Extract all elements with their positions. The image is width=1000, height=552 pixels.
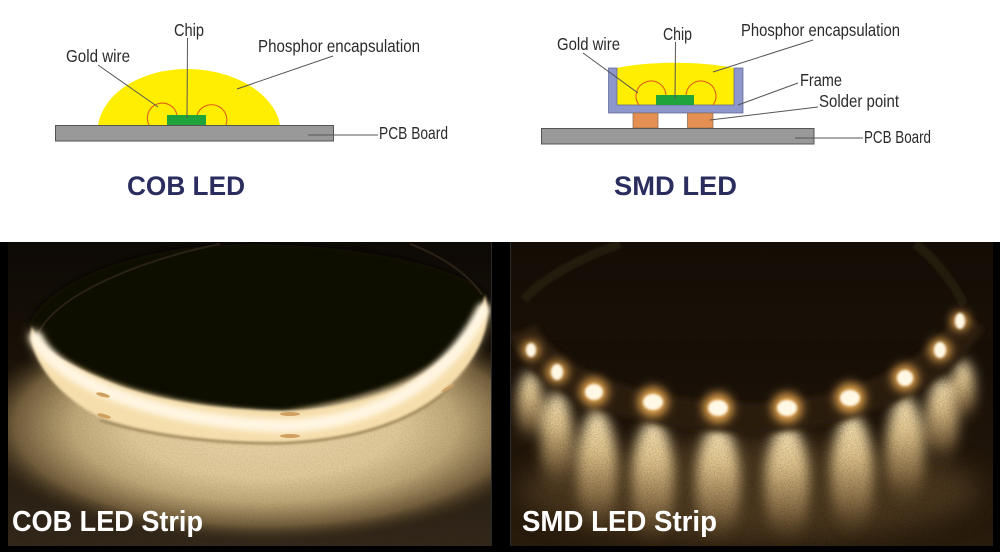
panel: COB LED strip photo [8, 242, 492, 546]
label: Solder point: Solder point [819, 91, 899, 111]
label: Gold wire: Gold wire [66, 46, 130, 66]
panel: SMD LED diagram [542, 20, 931, 147]
panel: COB LED diagram [56, 20, 448, 143]
PCB board [56, 126, 334, 141]
LED halos [522, 312, 969, 423]
LED chips [526, 313, 965, 416]
caption: COB LED Strip: COB LED Strip [12, 506, 203, 538]
photo background [510, 242, 993, 546]
floor glow [520, 440, 980, 540]
panel: SMD LED strip photo [510, 242, 993, 546]
frame [608, 68, 743, 113]
solder points [633, 113, 713, 128]
back of strip [38, 244, 482, 335]
label: Chip: Chip [174, 20, 204, 40]
label: Gold wire: Gold wire [557, 34, 620, 54]
grain [11, 370, 491, 528]
leader lines [98, 38, 378, 135]
label: PCB Board: PCB Board [864, 127, 931, 147]
strip bright core [36, 310, 483, 426]
black photo band [0, 242, 1000, 552]
leader lines [583, 40, 863, 138]
strip band [523, 320, 972, 418]
caption: SMD LED Strip: SMD LED Strip [522, 506, 717, 538]
label: PCB Board: PCB Board [379, 123, 448, 143]
heading: COB LED: COB LED [127, 171, 245, 201]
label: Chip: Chip [663, 24, 692, 44]
strip crescent [31, 295, 488, 441]
dark inner area of the loop [28, 274, 484, 412]
strip glow [22, 299, 491, 384]
floor glow [8, 350, 491, 538]
gold wires [636, 81, 716, 105]
phosphor dome [98, 69, 280, 125]
solder marks [96, 383, 455, 438]
shadow under strip [100, 388, 450, 443]
chip [167, 115, 206, 125]
heading: SMD LED: SMD LED [614, 171, 737, 201]
label: Phosphor encapsulation: Phosphor encapsulation [258, 36, 420, 56]
photo edge line [491, 242, 492, 546]
photo edge line [510, 242, 511, 546]
reflections [517, 360, 975, 545]
photo background [8, 242, 492, 546]
chip [656, 95, 694, 105]
gold wires [147, 103, 227, 125]
PCB board [542, 128, 814, 144]
label: Phosphor encapsulation: Phosphor encapsulation [741, 20, 900, 40]
phosphor fill [617, 63, 734, 105]
back of strip [524, 244, 964, 305]
label: Frame: Frame [800, 70, 842, 90]
grain [512, 358, 986, 546]
